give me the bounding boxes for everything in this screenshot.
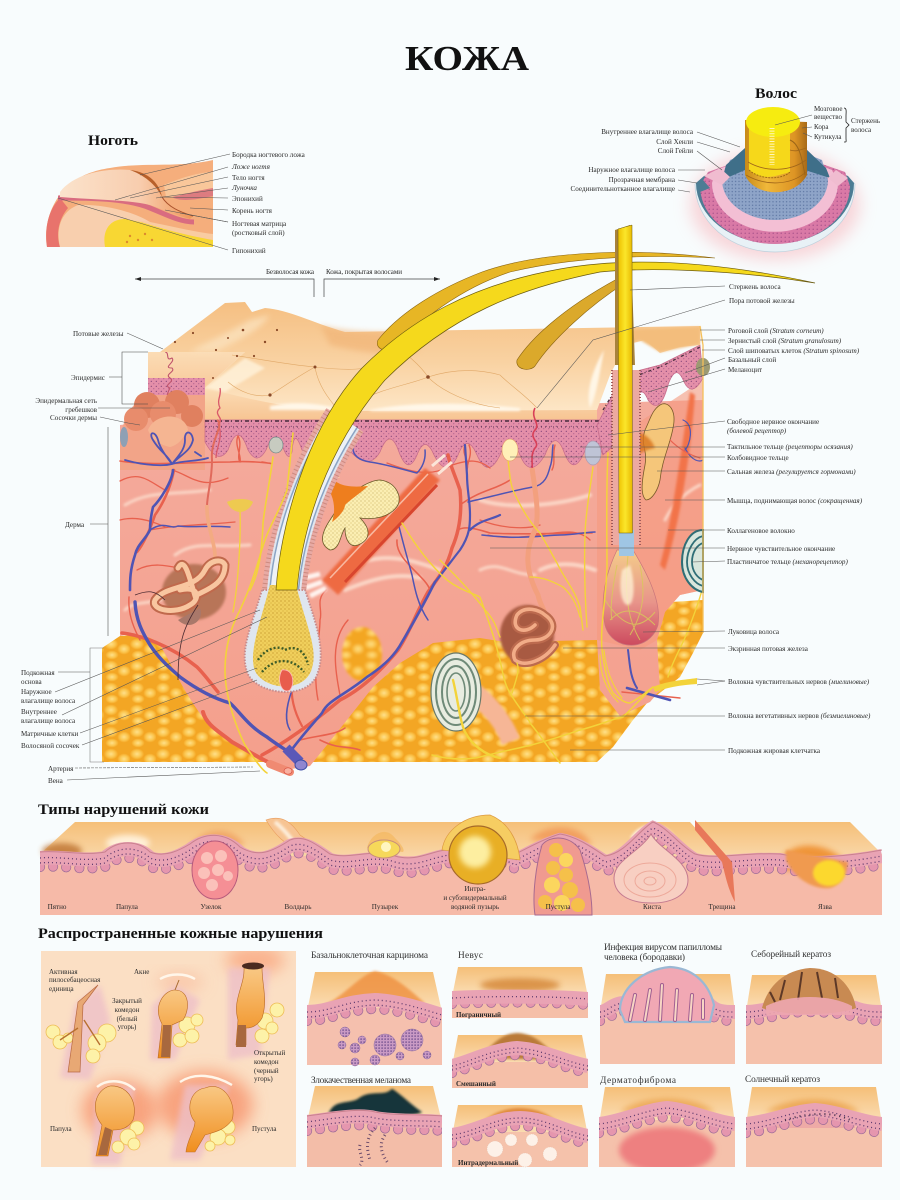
labels: right of main diagram bbox=[727, 283, 871, 755]
panel: lesion types strip bbox=[40, 815, 882, 915]
panel: seborrheic keratosis bbox=[746, 949, 882, 1064]
label: Волокна вегетативных нервов (безмиелиновые) bbox=[728, 712, 871, 720]
bulla bbox=[442, 815, 520, 884]
back pore spiral bbox=[216, 388, 221, 458]
main follicle bbox=[283, 420, 345, 610]
label: комедон bbox=[254, 1058, 279, 1066]
label: Наружное bbox=[21, 688, 52, 696]
label: (черный bbox=[254, 1067, 279, 1075]
label: Пустула bbox=[546, 903, 571, 911]
label: Дерма bbox=[65, 521, 85, 529]
label: Подкожная жировая клетчатка bbox=[728, 747, 821, 755]
nail leader lines bbox=[58, 154, 230, 250]
label: гребешков bbox=[65, 406, 98, 414]
label: Кутикула bbox=[814, 133, 842, 141]
label: Артерия bbox=[48, 765, 74, 773]
label: Слой Гейли bbox=[658, 147, 693, 155]
label: Тактильное тельце (рецепторы осязания) bbox=[727, 443, 853, 451]
label: Пустула bbox=[252, 1125, 277, 1133]
vessel ends bbox=[270, 748, 307, 774]
label: Соединительнотканное влагалище bbox=[571, 185, 675, 193]
label: влагалище волоса bbox=[21, 717, 76, 725]
blood vessels bbox=[120, 432, 680, 774]
label: Волдырь bbox=[285, 903, 312, 911]
main skin cross-section bbox=[102, 225, 815, 774]
label: (ростковый слой) bbox=[232, 229, 285, 237]
label: (белый bbox=[117, 1015, 138, 1023]
surface bumps bbox=[42, 818, 850, 870]
label: Слой Хенли bbox=[656, 138, 693, 146]
label: Волокна чувствительных нервов (миелиновые) bbox=[728, 678, 870, 686]
heading: hair: Волос bbox=[755, 86, 797, 102]
label: волоса bbox=[851, 126, 872, 134]
label: Эпидермальная сеть bbox=[35, 397, 98, 405]
label: Пузырек bbox=[372, 903, 399, 911]
pacinian corpuscle right bbox=[682, 530, 703, 592]
label: единица bbox=[49, 985, 75, 993]
cyst bbox=[614, 834, 688, 903]
label: Киста bbox=[643, 903, 662, 911]
label: Узелок bbox=[201, 903, 222, 911]
heading: types of lesions: Типы нарушений кожи bbox=[38, 802, 209, 818]
label: Подкожная bbox=[21, 669, 55, 677]
arteries bbox=[120, 436, 680, 770]
label: Бородка ногтевого ложа bbox=[232, 151, 306, 159]
nerves bbox=[225, 433, 702, 773]
epidermis band bbox=[40, 822, 882, 873]
heading: Инфекция вирусом папилломы bbox=[604, 942, 723, 953]
papule bbox=[95, 1086, 144, 1156]
label: угорь) bbox=[118, 1023, 137, 1031]
label: Активная bbox=[49, 968, 78, 976]
skin arcs bbox=[97, 974, 232, 1090]
main hair shaft bbox=[276, 262, 815, 590]
panel: nevus bbox=[452, 951, 588, 1167]
label: Потовые железы bbox=[73, 330, 124, 338]
right follicle bbox=[612, 370, 640, 545]
label: влагалище волоса bbox=[21, 697, 76, 705]
label: Сосочки дермы bbox=[50, 414, 97, 422]
label: Базальный слой bbox=[728, 356, 776, 364]
fat connective band bbox=[462, 678, 520, 745]
panel: papilloma virus bbox=[600, 942, 735, 1064]
fat island bbox=[342, 627, 382, 681]
label: Роговой слой (Stratum corneum) bbox=[728, 327, 824, 335]
labels: left of main diagram bbox=[21, 330, 124, 785]
pacinian corpuscle center bbox=[431, 653, 500, 758]
halos bbox=[60, 968, 270, 1165]
label: комедон bbox=[115, 1006, 140, 1014]
label: Стержень bbox=[851, 117, 880, 125]
junctional nevus bbox=[452, 967, 588, 1019]
label: Мозговое bbox=[814, 105, 842, 113]
label: Меланоцит bbox=[728, 366, 762, 374]
hair shaft 2 bbox=[377, 252, 715, 351]
right sweat gland bbox=[500, 408, 555, 665]
heading: Базальноклеточная карцинома bbox=[311, 951, 428, 961]
arrow: hairy skin bbox=[324, 277, 440, 297]
label: Наружное влагалище волоса bbox=[588, 166, 676, 174]
label: Пора потовой железы bbox=[729, 297, 795, 305]
keratosis growth bbox=[762, 968, 856, 1015]
label: Стержень волоса bbox=[729, 283, 781, 291]
label: Сальная железа (регулируется гормонами) bbox=[727, 468, 856, 476]
hair shaft 3 bbox=[517, 279, 625, 369]
heading line two: человека (бородавки) bbox=[604, 952, 685, 963]
nail illustration bbox=[46, 160, 213, 247]
label: Внутреннее bbox=[21, 708, 57, 716]
pustule bbox=[534, 838, 592, 915]
label: Нервное чувствительное окончание bbox=[727, 545, 835, 553]
label: Свободное нервное окончание bbox=[727, 418, 819, 426]
label: Луночка bbox=[231, 184, 257, 192]
hair cap bbox=[619, 530, 634, 556]
label: пилосебацеосная bbox=[49, 976, 101, 984]
leader lines: main diagram bbox=[55, 286, 725, 780]
label: Экзринная потовая железа bbox=[728, 645, 809, 653]
strip surface bbox=[40, 822, 882, 870]
title: КОЖА bbox=[405, 39, 530, 78]
intradermal nevus bbox=[452, 1105, 588, 1167]
glows bbox=[82, 946, 285, 1140]
strip dermis bbox=[40, 856, 882, 915]
nodule bbox=[192, 841, 238, 899]
tumor nests bbox=[338, 1027, 431, 1066]
hair section leader lines bbox=[678, 108, 849, 192]
label: и субэпидермальный bbox=[443, 894, 507, 902]
skin surface bbox=[160, 302, 700, 411]
label: Кора bbox=[814, 123, 829, 131]
skin zones arrows bbox=[135, 268, 440, 297]
muscle bbox=[304, 455, 452, 596]
label: Гипонихий bbox=[232, 247, 266, 255]
heading: Невус bbox=[458, 951, 483, 961]
label: Трещина bbox=[709, 903, 736, 911]
panel: basal cell carcinoma bbox=[307, 951, 442, 1066]
label: Прозрачная мембрана bbox=[609, 176, 676, 184]
label: Коллагеновое волокно bbox=[727, 527, 795, 535]
heading: nail: Ноготь bbox=[88, 133, 138, 149]
label: Папула bbox=[50, 1125, 73, 1133]
pilosebaceous unit bbox=[46, 985, 116, 1072]
acne background bbox=[41, 951, 296, 1167]
label: Эпидермис bbox=[71, 374, 105, 382]
pustule bbox=[186, 1086, 235, 1152]
panel: dermatofibroma bbox=[599, 1075, 735, 1173]
label: Пограничный bbox=[456, 1011, 501, 1019]
main hair bulb bbox=[245, 585, 321, 692]
label: Колбовидное тельце bbox=[727, 454, 789, 462]
label: Вена bbox=[48, 777, 64, 785]
open comedone bbox=[236, 962, 284, 1047]
heading: Злокачественная меланома bbox=[311, 1076, 411, 1086]
compound nevus bbox=[452, 1033, 588, 1088]
label: Корень ногтя bbox=[232, 207, 273, 215]
arrow: hairless skin bbox=[135, 277, 314, 297]
label: Язва bbox=[818, 903, 833, 911]
label: Акне bbox=[134, 968, 149, 976]
ulcer bbox=[786, 850, 848, 888]
label: Волосяной сосочек bbox=[21, 742, 80, 750]
label: Ложе ногтя bbox=[231, 163, 270, 171]
vesicle bbox=[367, 832, 404, 858]
epidermis band bbox=[205, 345, 703, 468]
label: Кожа, покрытая волосами bbox=[326, 268, 402, 276]
right hair bulb bbox=[603, 550, 659, 645]
label: Слой шиповатых клеток (Stratum spinosum) bbox=[728, 347, 860, 355]
label: Внутреннее влагалище волоса bbox=[601, 128, 694, 136]
back tab of the block bbox=[148, 352, 245, 415]
label: Открытый bbox=[254, 1049, 285, 1057]
dermis bbox=[120, 380, 703, 770]
panel: solar keratosis bbox=[745, 1074, 882, 1167]
receptors bbox=[269, 437, 601, 465]
label: Закрытый bbox=[112, 997, 142, 1005]
label: Смешанный bbox=[456, 1080, 496, 1088]
label: Интрадермальный bbox=[458, 1159, 518, 1167]
panel: nail bbox=[46, 133, 306, 255]
subcutaneous fat bbox=[102, 600, 703, 762]
heading: Солнечный кератоз bbox=[745, 1074, 820, 1085]
left sweat gland bbox=[135, 420, 226, 680]
label: Интра- bbox=[464, 885, 486, 893]
labels bbox=[48, 885, 833, 911]
label: (болевой рецептор) bbox=[727, 427, 787, 435]
label: вещество bbox=[814, 113, 842, 121]
label: водяной пузырь bbox=[451, 903, 500, 911]
hair section illustration bbox=[690, 107, 860, 260]
front cut face bbox=[205, 388, 597, 430]
label: Ногтевая матрица bbox=[232, 220, 287, 228]
label: Пятно bbox=[48, 903, 67, 911]
label: Зернистый слой (Stratum granulosum) bbox=[728, 337, 842, 345]
label: основа bbox=[21, 678, 42, 686]
label: Папула bbox=[116, 903, 139, 911]
veins bbox=[125, 432, 670, 760]
right edge of block bbox=[700, 326, 703, 633]
sebaceous gland bbox=[316, 440, 399, 550]
label: Безволосая кожа bbox=[266, 268, 315, 276]
vertical hair shaft bbox=[615, 225, 635, 533]
label: Луковица волоса bbox=[728, 628, 780, 636]
panel: hair cross-section bbox=[571, 86, 880, 260]
label: Матричные клетки bbox=[21, 730, 79, 738]
label: Пластинчатое тельце (механорецептор) bbox=[727, 558, 848, 566]
heading: Дерматофиброма bbox=[600, 1075, 676, 1086]
fissure bbox=[695, 820, 735, 902]
right sebaceous gland and muscle bbox=[632, 358, 710, 570]
panel: malignant melanoma bbox=[307, 1076, 442, 1167]
wart bbox=[620, 967, 714, 1022]
panel: acne bbox=[41, 946, 296, 1167]
label: Тело ногтя bbox=[232, 174, 265, 182]
dermal ridges bbox=[120, 390, 205, 470]
label: угорь) bbox=[254, 1075, 273, 1083]
closed comedone bbox=[158, 980, 203, 1058]
heading: common disorders: Распространенные кожные нарушения bbox=[38, 926, 323, 942]
heading: Себорейный кератоз bbox=[751, 949, 831, 960]
label: Мышца, поднимающая волос (сокращенная) bbox=[727, 497, 863, 505]
label: Эпонихий bbox=[232, 195, 263, 203]
